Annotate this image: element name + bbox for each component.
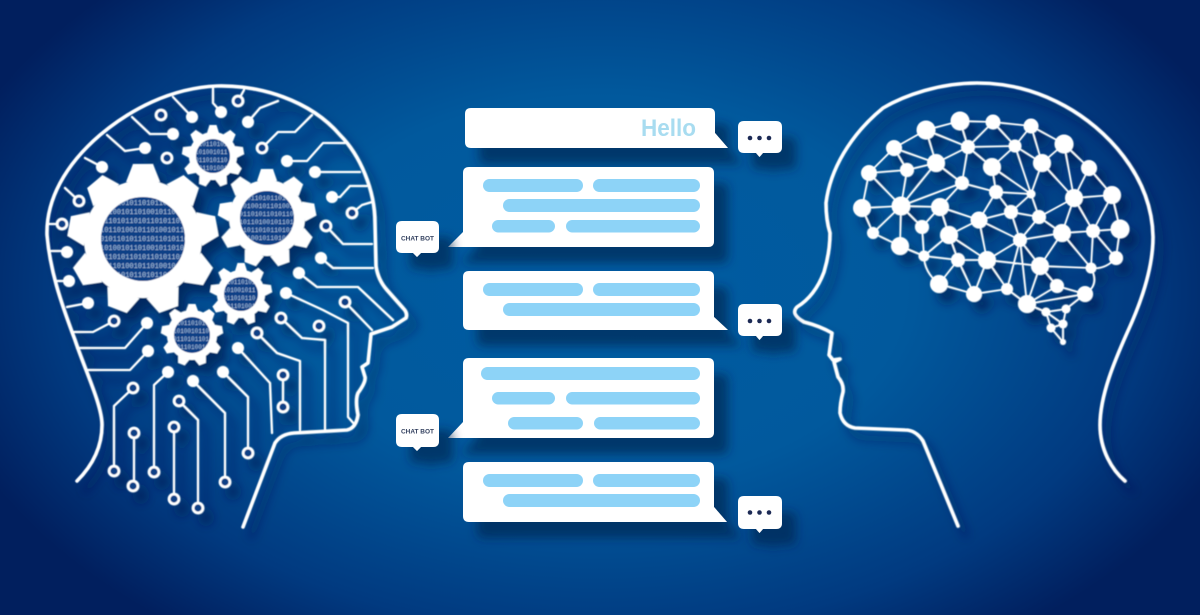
head outline (47, 86, 407, 527)
large gear: 0110101101011010110101 (100, 254, 192, 262)
brain network nodes (853, 112, 1130, 345)
large gear: 1011010010110100101101 (100, 227, 192, 235)
middle small gear: 010110101 (223, 279, 256, 286)
large gear: 0101101011010110101101 (100, 272, 192, 280)
CHAT BOT tag 2: CHAT BOT (401, 428, 434, 436)
chat bubble: Hello (465, 108, 728, 148)
typing indicator bubble 1 (738, 121, 782, 157)
bottom small gear: 1011010010 (173, 344, 209, 351)
chat bubble: user message 2 (463, 271, 728, 330)
Hello text: Hello (641, 115, 696, 142)
upper right gear: 10100101101001 (239, 203, 294, 210)
large gear: 1011010010110100101101 (100, 263, 192, 271)
top small gear (181, 125, 245, 187)
upper right gear: 01011010110101 (239, 195, 294, 202)
bottom small gear: 0101101011 (173, 320, 209, 327)
solid circuit nodes (61, 106, 338, 387)
bottom small gear (160, 304, 224, 366)
chat bubble: user message 3 (463, 462, 727, 522)
chat bubble: bot reply 1 (448, 167, 714, 247)
upper right gear: 10100101101001 (239, 235, 294, 242)
CHAT BOT tag 1 (396, 221, 439, 257)
typing indicator bubble 2 (738, 304, 782, 340)
large gear: 0101101011010110101101 (100, 236, 192, 244)
CHAT BOT tag 2 (396, 414, 439, 451)
upper right gear: 10110100101101 (239, 219, 294, 226)
large gear: 0101101011010110101101 (100, 200, 192, 208)
top small gear: 101001011 (195, 149, 228, 156)
large gear (66, 164, 220, 315)
typing indicator bubble 3 (738, 496, 782, 533)
middle small gear: 011010110 (223, 295, 256, 302)
upper right gear: 01101011010110 (239, 211, 294, 218)
bottom small gear: 0110101101 (173, 336, 209, 343)
right human head (795, 83, 1153, 526)
chat bubble: bot reply 2 (448, 358, 714, 438)
large gear: 0110101101011010110101 (100, 218, 192, 226)
upper right gear: 01011010110101 (239, 227, 294, 234)
upper right gear (217, 169, 317, 267)
head outline (795, 83, 1153, 526)
middle small gear: 101101001 (223, 303, 256, 310)
brain network links (862, 121, 1120, 342)
top small gear: 101101001 (195, 165, 228, 172)
top small gear: 010110101 (195, 141, 228, 148)
circuit traces (48, 87, 393, 508)
ring circuit nodes (57, 96, 357, 513)
large gear: 1010010110100101101001 (100, 209, 192, 217)
CHAT BOT tag 1: CHAT BOT (401, 236, 434, 242)
middle small gear: 101001011 (223, 287, 256, 294)
large gear: 1010010110100101101001 (100, 245, 192, 253)
top small gear: 011010110 (195, 157, 228, 164)
bottom small gear: 1010010110 (173, 328, 209, 335)
middle small gear (209, 263, 273, 325)
left AI head (47, 86, 407, 527)
